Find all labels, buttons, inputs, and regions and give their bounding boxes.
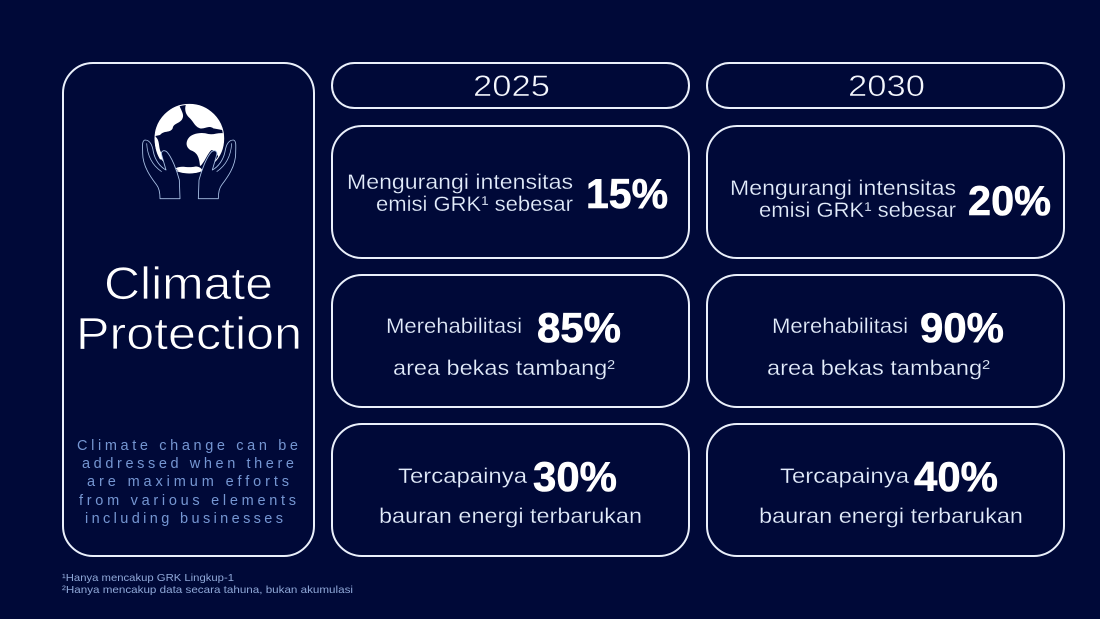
card: 2025 mine rehabilitation: 85% bbox=[537, 304, 621, 351]
card: 2030 emissions intensity: emisi GRK¹ sebesar bbox=[759, 199, 956, 222]
header: 2025 bbox=[332, 63, 689, 108]
card: 2030 renewable energy: bauran energi terbarukan bbox=[759, 505, 1023, 528]
card: 2025 emissions intensity bbox=[332, 126, 689, 258]
heading: climate protection: Protection bbox=[76, 308, 302, 359]
card: 2025 emissions intensity: Mengurangi intensitas bbox=[347, 171, 573, 194]
text block: description: from various elements bbox=[79, 493, 296, 509]
text block: description: are maximum efforts bbox=[87, 474, 289, 490]
card: 2030 emissions intensity: 20% bbox=[968, 177, 1051, 224]
card: 2025 renewable energy: 30% bbox=[533, 453, 617, 500]
header: 2030 bbox=[707, 63, 1064, 108]
icon: globe held by hands bbox=[143, 104, 236, 199]
header: 2025: 2025 bbox=[473, 70, 550, 103]
card: 2030 renewable energy bbox=[707, 424, 1064, 556]
footnotes bbox=[62, 572, 353, 596]
card: 2030 mine rehabilitation: Merehabilitasi bbox=[772, 315, 908, 338]
footnotes: ²Hanya mencakup data secara tahuna, bukan akumulasi bbox=[62, 584, 353, 596]
card: 2030 renewable energy: Tercapainya bbox=[780, 465, 909, 488]
card: 2025 renewable energy: bauran energi terbarukan bbox=[379, 505, 642, 528]
card: 2025 mine rehabilitation bbox=[332, 275, 689, 407]
card: 2025 mine rehabilitation: Merehabilitasi bbox=[386, 315, 522, 338]
heading: climate protection bbox=[76, 258, 302, 359]
text block: description: Climate change can be bbox=[77, 438, 298, 454]
card: 2025 renewable energy bbox=[332, 424, 689, 556]
heading: climate protection: Climate bbox=[104, 258, 273, 309]
footnotes: ¹Hanya mencakup GRK Lingkup-1 bbox=[62, 572, 234, 584]
header: 2030: 2030 bbox=[848, 70, 925, 103]
card: 2030 mine rehabilitation: 90% bbox=[920, 304, 1004, 351]
text block: description: addressed when there bbox=[82, 456, 294, 472]
card: 2025 renewable energy: Tercapainya bbox=[398, 465, 527, 488]
card: 2030 renewable energy: 40% bbox=[914, 453, 998, 500]
card: 2025 emissions intensity: emisi GRK¹ sebesar bbox=[376, 193, 573, 216]
panel: climate protection bbox=[63, 63, 314, 556]
card: 2025 emissions intensity: 15% bbox=[586, 170, 668, 217]
card: 2025 mine rehabilitation: area bekas tambang² bbox=[393, 357, 615, 380]
card: 2030 emissions intensity bbox=[707, 126, 1064, 258]
text block: description: including businesses bbox=[85, 511, 283, 527]
card: 2030 emissions intensity: Mengurangi intensitas bbox=[730, 177, 956, 200]
card: 2030 mine rehabilitation bbox=[707, 275, 1064, 407]
card: 2030 mine rehabilitation: area bekas tambang² bbox=[767, 357, 990, 380]
text block: description bbox=[77, 438, 298, 527]
